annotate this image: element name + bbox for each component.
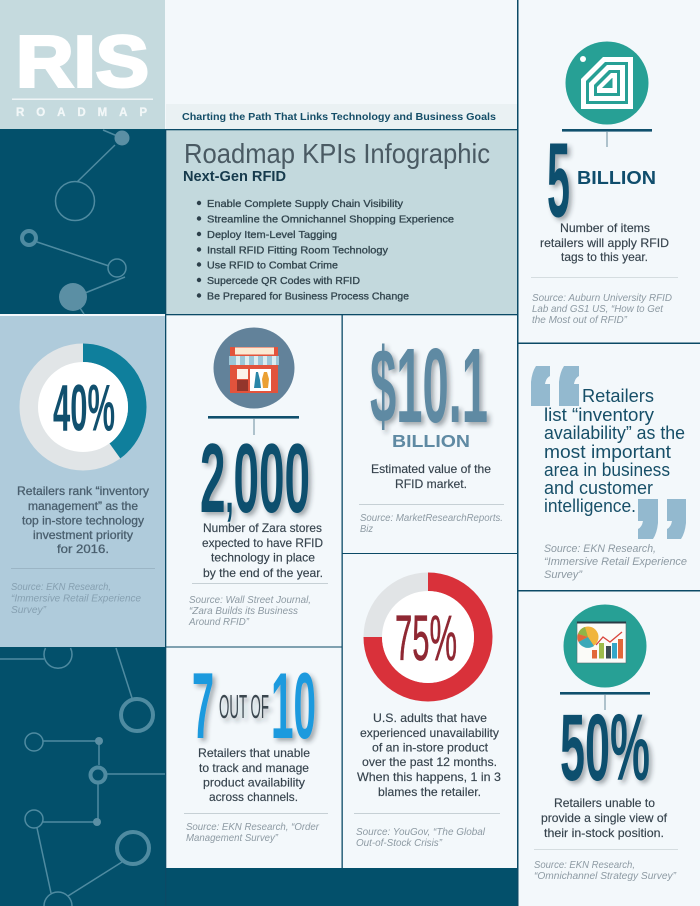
source: Source: Auburn University RFID <box>532 292 672 304</box>
description: their in-stock position. <box>544 826 664 840</box>
source <box>532 292 672 326</box>
bullet list: Install RFID Fitting Room Technology <box>207 244 389 256</box>
source <box>360 512 503 535</box>
description <box>541 796 668 840</box>
donut chart 75 percent: 75% <box>395 602 457 674</box>
icon: RFID tag <box>566 42 648 124</box>
icon: store <box>214 328 294 408</box>
description <box>198 746 310 804</box>
description: tags to this year. <box>561 250 648 264</box>
source: Source: EKN Research, “Order <box>186 821 319 833</box>
bullet list: Enable Complete Supply Chain Visibility <box>207 198 404 210</box>
source: Source: MarketResearchReports. <box>360 512 503 524</box>
description <box>371 462 491 491</box>
source: Lab and GS1 US, “How to Get <box>532 303 664 315</box>
quote text <box>544 386 685 516</box>
panel: 2000 Zara stores <box>188 328 328 628</box>
description: expected to have RFID <box>202 536 323 550</box>
panel: 5 billion <box>531 42 678 326</box>
panel: 7 out of 10: 7 <box>192 653 214 758</box>
billion label: BILLION <box>577 168 656 188</box>
panel: network decoration top <box>0 129 166 314</box>
icon: closing quote mark <box>638 499 686 539</box>
connector <box>208 416 299 435</box>
source: Survey” <box>11 604 46 616</box>
description: investment priority <box>33 528 133 542</box>
panel: 50 percent <box>534 604 678 882</box>
description <box>540 221 669 264</box>
description <box>357 711 501 799</box>
description: to track and manage <box>199 761 309 775</box>
description <box>202 521 323 580</box>
panel: 40 percent <box>0 316 166 647</box>
source: Source: YouGov, “The Global <box>356 826 486 838</box>
source <box>534 859 676 882</box>
bottom dark band <box>166 868 517 906</box>
description: top in-store technology <box>22 514 144 528</box>
source: Survey” <box>544 569 583 581</box>
panel: network decoration bottom <box>0 647 166 906</box>
source: “Immersive Retail Experience <box>11 592 141 604</box>
source: Source: Wall Street Journal, <box>189 594 311 606</box>
panel: KPI title and list <box>166 130 517 314</box>
quote text: and customer <box>544 478 653 498</box>
panel: 7 out of 10: 10 <box>271 653 316 758</box>
description: Retailers that unable <box>198 746 310 760</box>
description: product availability <box>203 776 305 790</box>
description: over the past 12 months. <box>362 755 497 769</box>
quote text: list “inventory <box>544 405 654 425</box>
description <box>17 484 149 556</box>
quote text: intelligence. <box>544 496 636 516</box>
description: Number of items <box>560 221 650 235</box>
title: Roadmap KPIs Infographic <box>184 138 490 169</box>
donut chart 40 percent <box>20 344 147 470</box>
description: When this happens, 1 in 3 <box>357 770 501 784</box>
bullet list: Use RFID to Combat Crime <box>207 260 338 272</box>
source: Source: EKN Research, <box>11 581 111 593</box>
source: “Omnichannel Strategy Survey” <box>534 870 676 882</box>
connector <box>562 129 652 147</box>
source <box>544 543 687 581</box>
panel: 7 out of 10: OUT OF <box>219 688 269 725</box>
description: for 2016. <box>57 542 109 556</box>
description: Retailers rank “inventory <box>17 484 149 498</box>
donut chart 75 percent <box>364 572 492 702</box>
source <box>188 594 311 628</box>
panel: 5 billion: 5 <box>547 122 570 240</box>
tagline band <box>166 104 517 129</box>
source: Source: EKN Research, <box>534 859 635 871</box>
bullet list: Be Prepared for Business Process Change <box>207 290 409 302</box>
description: Retailers unable to <box>554 796 655 810</box>
panel borders <box>165 0 700 906</box>
description: retailers will apply RFID <box>540 236 669 250</box>
description: Number of Zara stores <box>203 521 322 535</box>
source: Out-of-Stock Crisis” <box>356 837 442 849</box>
bullet list: Deploy Item-Level Tagging <box>207 229 337 241</box>
source: “Immersive Retail Experience <box>544 556 687 568</box>
panel: 10.1 billion <box>359 327 504 535</box>
logo subtitle: ROADMAP <box>16 107 147 119</box>
source: “Zara Builds its Business <box>189 605 299 617</box>
bullet list: Supercede QR Codes with RFID <box>207 275 360 287</box>
billion label: BILLION <box>392 431 470 451</box>
description: experienced unavailability <box>360 726 499 740</box>
description: blames the retailer. <box>378 785 481 799</box>
tagline band: Charting the Path That Links Technology and Business Goals <box>182 111 496 123</box>
panel: 7 out of 10 <box>184 653 328 844</box>
description: technology in place <box>211 550 315 564</box>
subtitle: Next-Gen RFID <box>183 169 286 185</box>
quote text: most important <box>544 442 671 462</box>
source: Management Survey” <box>186 832 278 844</box>
connector <box>560 692 650 710</box>
icon: presentation chart <box>564 604 646 688</box>
panel: 75 percent <box>354 572 501 849</box>
source <box>11 581 141 616</box>
description: across channels. <box>209 790 298 804</box>
source <box>356 826 486 849</box>
description: provide a single view of <box>541 811 668 825</box>
description: U.S. adults that have <box>373 711 487 725</box>
logo wordmark RIS: RIS <box>16 22 149 102</box>
source: Biz <box>360 523 374 535</box>
source: the Most out of RFID” <box>532 314 627 326</box>
panel: 10.1 billion: $10.1 <box>370 327 488 445</box>
quote text: availability” as the <box>544 423 685 443</box>
description: by the end of the year. <box>203 566 323 580</box>
description: management” as the <box>28 499 138 513</box>
description: RFID market. <box>395 477 467 491</box>
description: of an in-store product <box>372 740 489 754</box>
description: Estimated value of the <box>371 462 491 476</box>
bullet list <box>197 198 454 302</box>
panel: logo <box>0 0 165 129</box>
source: Around RFID” <box>188 616 249 628</box>
source <box>186 821 319 844</box>
icon: opening quote mark <box>531 366 579 406</box>
panel: quote <box>531 366 687 581</box>
source: Source: EKN Research, <box>544 543 656 555</box>
big number 2,000: 2,000 <box>200 423 310 533</box>
bullet list: Streamline the Omnichannel Shopping Experience <box>207 214 454 226</box>
quote text: Retailers <box>582 386 654 406</box>
donut chart 40 percent: 40% <box>53 370 115 444</box>
quote text: area in business <box>544 460 670 480</box>
